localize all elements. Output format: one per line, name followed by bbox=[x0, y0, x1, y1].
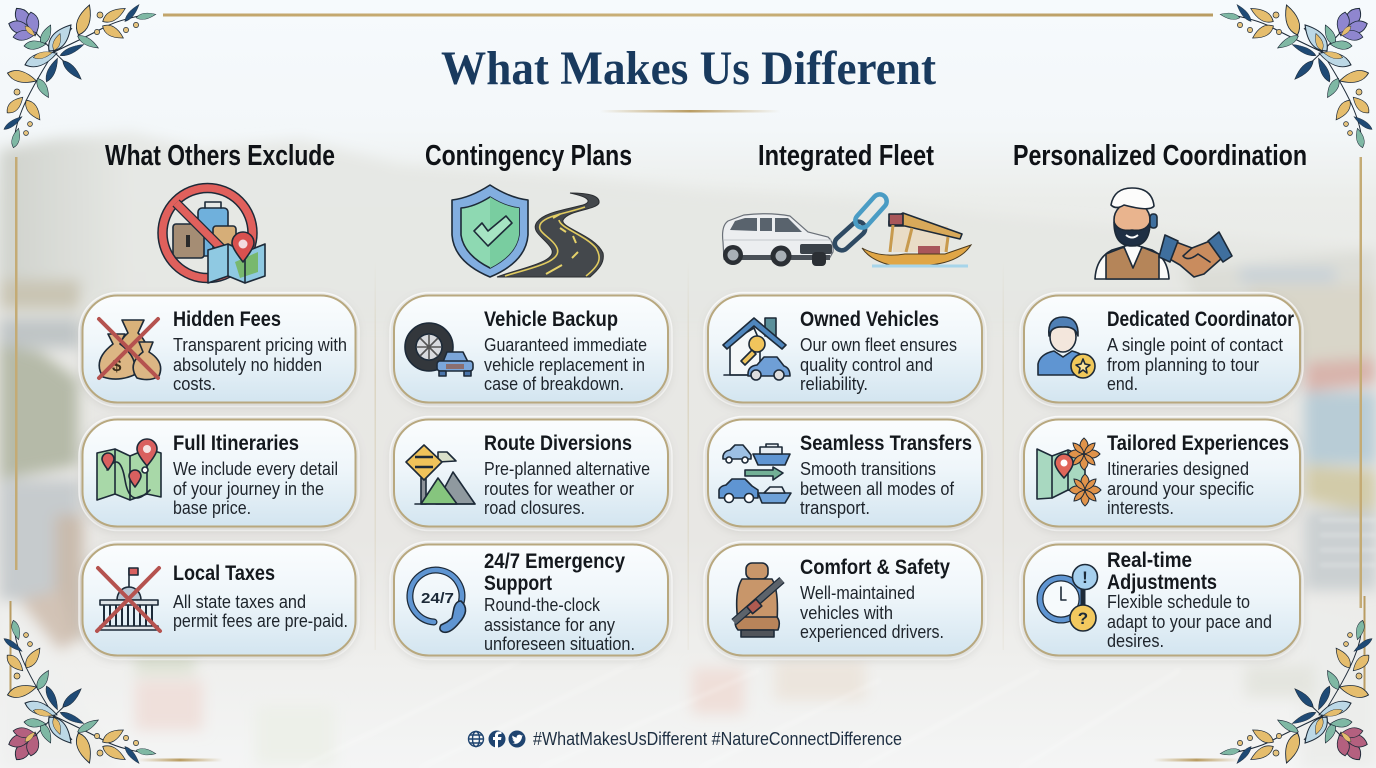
column heading: Integrated Fleet: Integrated Fleet bbox=[758, 140, 934, 172]
card: Vehicle Backup: Vehicle Backup bbox=[484, 308, 618, 331]
card: Dedicated Coordinator: from planning to tour bbox=[1107, 354, 1259, 375]
card: Full Itineraries: Full Itineraries bbox=[173, 432, 299, 455]
icon: clock with alert and question: ? bbox=[1078, 609, 1088, 628]
card: Dedicated Coordinator: end. bbox=[1107, 373, 1138, 394]
card: Vehicle Backup: Guaranteed immediate bbox=[484, 334, 647, 355]
card: Tailored Experiences: Itineraries designed bbox=[1107, 458, 1249, 479]
icon: crossed-out money bags bbox=[99, 319, 161, 380]
card: 24/7 Emergency Support: Support bbox=[484, 572, 552, 595]
footer: social icons and hashtags: #WhatMakesUsDifferent #NatureConnectDifference bbox=[533, 729, 902, 749]
card: Route Diversions: routes for weather or bbox=[484, 478, 634, 499]
card: Full Itineraries: We include every detail bbox=[173, 458, 338, 479]
card: Hidden Fees: costs. bbox=[173, 373, 216, 394]
column heading: Personalized Coordination: Personalized Coordination bbox=[1013, 140, 1307, 172]
icon: road sign and mountains bbox=[406, 445, 475, 504]
card: Real-time Adjustments bbox=[1020, 542, 1303, 660]
card: Vehicle Backup: vehicle replacement in bbox=[484, 354, 645, 375]
card: Comfort & Safety: vehicles with bbox=[800, 602, 893, 623]
icon: facebook bbox=[488, 730, 506, 748]
card: Tailored Experiences: around your specific bbox=[1107, 478, 1254, 499]
card: Local Taxes: permit fees are pre-paid. bbox=[173, 610, 348, 631]
card: 24/7 Emergency Support: 24/7 Emergency bbox=[484, 550, 625, 573]
card: Dedicated Coordinator: A single point of contact bbox=[1107, 334, 1283, 355]
card: Local Taxes: Local Taxes bbox=[173, 562, 275, 585]
card: Owned Vehicles bbox=[704, 292, 986, 406]
card: Owned Vehicles: Owned Vehicles bbox=[800, 308, 939, 331]
card: Comfort & Safety: Well-maintained bbox=[800, 582, 915, 603]
icon: crossed-out government building bbox=[97, 568, 160, 631]
card: Hidden Fees bbox=[79, 292, 359, 406]
card: Dedicated Coordinator bbox=[1020, 292, 1303, 406]
card: Hidden Fees: Transparent pricing with bbox=[173, 334, 347, 355]
card: Tailored Experiences: interests. bbox=[1107, 497, 1174, 518]
card: Owned Vehicles: quality control and bbox=[800, 354, 933, 375]
corner floral: bottom left bbox=[2, 619, 156, 765]
corner floral: top left bbox=[2, 3, 156, 149]
card: Vehicle Backup: case of breakdown. bbox=[484, 373, 624, 394]
card: Owned Vehicles: Our own fleet ensures bbox=[800, 334, 957, 355]
card: Real-time Adjustments: desires. bbox=[1107, 630, 1164, 651]
card: Comfort & Safety bbox=[704, 542, 986, 660]
card: Seamless Transfers bbox=[704, 416, 986, 530]
icon: shield and road bbox=[452, 185, 603, 277]
icon: person with star badge bbox=[1038, 317, 1095, 378]
card: Full Itineraries: of your journey in the bbox=[173, 478, 324, 499]
title: What Makes Us Different bbox=[441, 42, 936, 95]
icon: clock with alert and question: ! bbox=[1082, 568, 1088, 587]
card: Hidden Fees: absolutely no hidden bbox=[173, 354, 322, 375]
corner floral: bottom right bbox=[1220, 619, 1374, 765]
card: Owned Vehicles: reliability. bbox=[800, 373, 868, 394]
card: Seamless Transfers: between all modes of bbox=[800, 478, 955, 499]
card: Route Diversions: Route Diversions bbox=[484, 432, 632, 455]
card: 24/7 Emergency Support: Round-the-clock bbox=[484, 594, 601, 615]
card: Route Diversions: Pre-planned alternative bbox=[484, 458, 650, 479]
card: Vehicle Backup bbox=[390, 292, 672, 406]
icon: globe bbox=[468, 732, 484, 746]
card: Dedicated Coordinator: Dedicated Coordinator bbox=[1107, 308, 1294, 331]
icon: no luggage with map bbox=[162, 188, 265, 283]
icon: tyre and car bbox=[405, 323, 473, 376]
card: Seamless Transfers: Seamless Transfers bbox=[800, 432, 972, 455]
icon: car seat with belt bbox=[734, 563, 782, 637]
card: Local Taxes: All state taxes and bbox=[173, 591, 306, 612]
card: Tailored Experiences bbox=[1020, 416, 1303, 530]
card: Tailored Experiences: Tailored Experiences bbox=[1107, 432, 1289, 455]
card: Comfort & Safety: Comfort & Safety bbox=[800, 556, 950, 579]
card: 24/7 Emergency Support: unforeseen situation. bbox=[484, 633, 635, 654]
icon: SUV, chain link and shikara boat bbox=[723, 191, 971, 266]
card: 24/7 Emergency Support: assistance for any bbox=[484, 614, 616, 635]
card: 24/7 Emergency Support bbox=[390, 542, 672, 660]
card: Hidden Fees: Hidden Fees bbox=[173, 308, 281, 331]
card: Seamless Transfers: transport. bbox=[800, 497, 870, 518]
corner floral: top right bbox=[1220, 3, 1374, 149]
card: Seamless Transfers: Smooth transitions bbox=[800, 458, 936, 479]
card: Real-time Adjustments: adapt to your pace and bbox=[1107, 611, 1272, 632]
icon: twitter bird bbox=[508, 730, 526, 748]
column heading: Contingency Plans: Contingency Plans bbox=[425, 140, 632, 172]
icon: coordinator with handshake bbox=[1095, 188, 1232, 279]
icon: clock with alert and question bbox=[1040, 564, 1098, 631]
icon: 24/7 phone support bbox=[410, 570, 466, 632]
icon: cars, boats and arrow bbox=[719, 444, 791, 503]
card: Route Diversions: road closures. bbox=[484, 497, 585, 518]
icon: house, key and car bbox=[723, 318, 790, 380]
card: Full Itineraries: base price. bbox=[173, 497, 251, 518]
icon: crossed-out money bags: $ bbox=[112, 356, 122, 375]
icon: 24/7 phone support: 24/7 bbox=[421, 591, 454, 607]
icon: map with pins bbox=[97, 439, 161, 500]
card: Real-time Adjustments: Adjustments bbox=[1107, 571, 1217, 594]
icon: map with flowers bbox=[1037, 438, 1101, 506]
card: Real-time Adjustments: Flexible schedule to bbox=[1107, 591, 1250, 612]
card: Comfort & Safety: experienced drivers. bbox=[800, 621, 944, 642]
column heading: What Others Exclude: What Others Exclude bbox=[105, 140, 335, 172]
card: Real-time Adjustments: Real-time bbox=[1107, 549, 1192, 572]
card: Full Itineraries bbox=[79, 416, 359, 530]
card: Route Diversions bbox=[390, 416, 672, 530]
card: Local Taxes bbox=[79, 542, 359, 660]
